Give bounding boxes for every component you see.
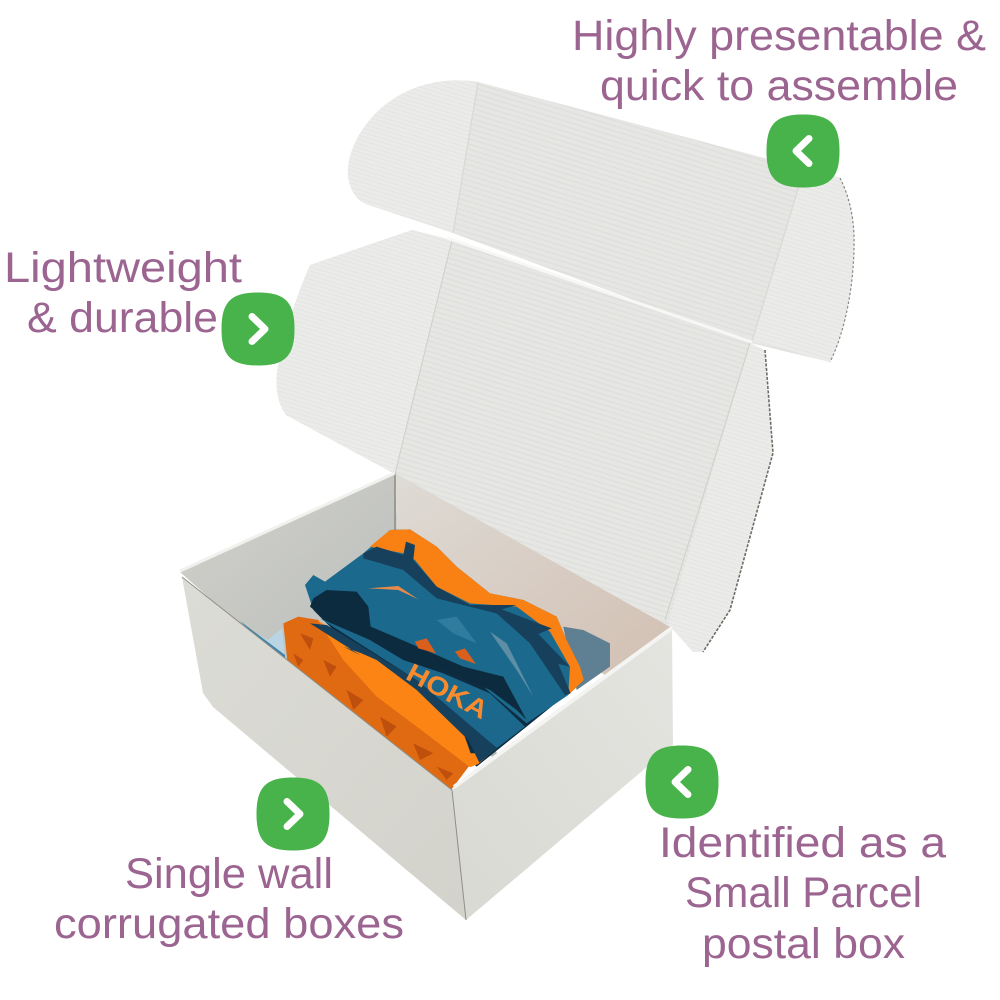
box left wall [182, 577, 466, 920]
right tissue [563, 627, 610, 690]
text: small parcel: postal box [702, 920, 906, 968]
shoe shadow base [313, 610, 570, 767]
text: small parcel: Identified as a [659, 819, 946, 867]
lid: rear panel with side tabs [348, 80, 854, 362]
shoes [283, 529, 610, 789]
text: highly presentable: Highly presentable & [572, 12, 986, 60]
text: highly presentable [572, 12, 986, 110]
text: single wall [54, 850, 404, 948]
text: single wall: corrugated boxes [54, 900, 404, 948]
text: small parcel: Small Parcel [685, 869, 922, 917]
back shoe [305, 529, 584, 723]
badge: single wall [256, 778, 330, 850]
tissue paper [238, 621, 286, 668]
HOKA logo: HOKA [402, 657, 494, 725]
front shoe [283, 617, 525, 789]
text: lightweight: & durable [27, 294, 218, 342]
text: highly presentable: quick to assemble [600, 62, 958, 110]
box interior [180, 473, 672, 760]
text: small parcel [659, 819, 946, 968]
box right wall [452, 628, 673, 920]
text: lightweight [4, 244, 242, 342]
badge: presentable [766, 114, 840, 188]
open box with shoes [180, 80, 854, 920]
badge: small parcel [646, 746, 718, 818]
box rim highlights [180, 473, 672, 920]
badge: lightweight [222, 292, 294, 366]
lid: middle panel with side tabs [276, 230, 773, 652]
text: single wall: Single wall [125, 850, 333, 898]
text: lightweight: Lightweight [4, 244, 242, 292]
